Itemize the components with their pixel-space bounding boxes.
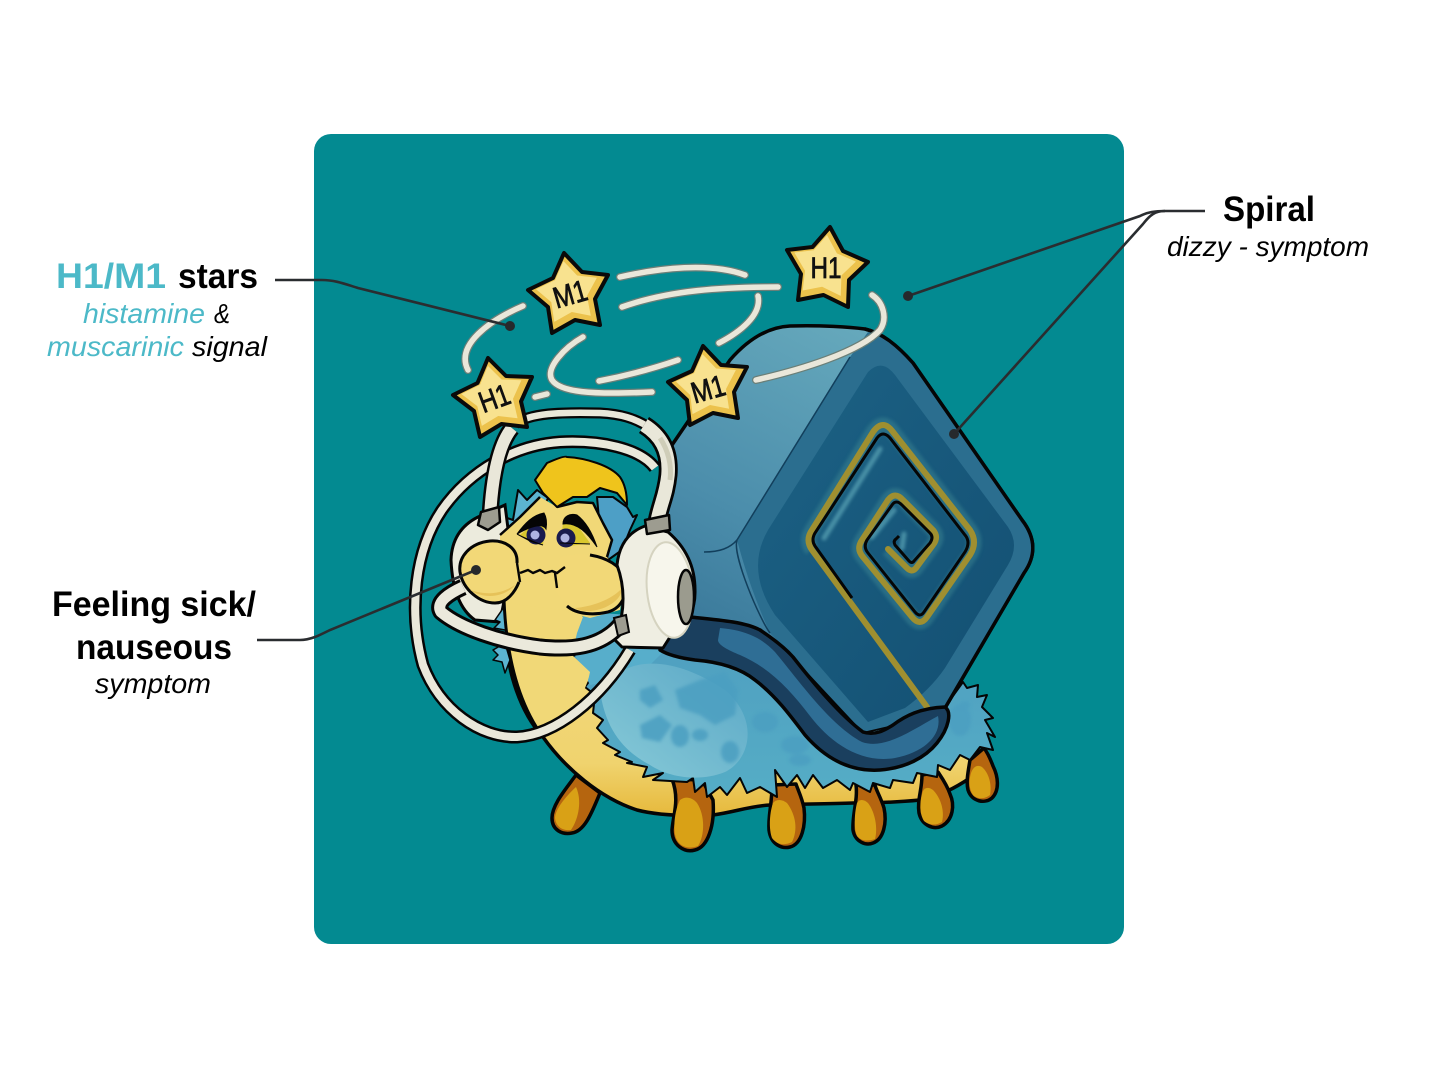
star: M1 top: M1 bbox=[549, 274, 591, 315]
shell: crease line bbox=[704, 357, 850, 633]
label: H1/M1 stars: histamine bbox=[83, 298, 205, 329]
shell: side face bbox=[640, 326, 1033, 732]
label: H1/M1 stars: stars bbox=[178, 257, 258, 296]
earcup: left bbox=[451, 505, 512, 622]
headband: top arch thin part bbox=[515, 413, 650, 428]
hair: golden quiff bbox=[535, 457, 627, 507]
head: outline bbox=[500, 497, 612, 557]
label: H1/M1 stars bbox=[47, 257, 268, 362]
label: H1/M1 stars: muscarinic bbox=[47, 331, 184, 362]
star: H1 right bbox=[787, 227, 868, 307]
label: H1/M1 stars: signal bbox=[192, 331, 268, 362]
eye: left bbox=[517, 513, 547, 545]
headband: right post bbox=[644, 425, 671, 522]
microphone boom bbox=[440, 587, 629, 648]
swirl: dizziness orbit lines bbox=[465, 267, 884, 397]
fur: left head tuft bbox=[500, 490, 548, 560]
panel: teal illustration background bbox=[314, 134, 1124, 944]
label: feeling sick/nauseous symptom: symptom bbox=[95, 668, 211, 699]
collar: right band clip bbox=[645, 515, 670, 534]
fur: patch behind neck bbox=[570, 612, 665, 685]
spiral: black line bbox=[813, 434, 968, 615]
star: M1 top bbox=[528, 253, 608, 333]
earcup: inner grey opening bbox=[678, 570, 694, 624]
shell: outline right side bbox=[865, 329, 1033, 708]
label: H1/M1 stars: H1/M1 bbox=[56, 257, 166, 296]
leader: feeling sick bbox=[257, 565, 481, 640]
fur: darker spots bbox=[640, 672, 971, 766]
star: H1 left bbox=[453, 358, 532, 437]
shell: spiral snail shell bbox=[640, 326, 1033, 732]
spiral: inner highlights bbox=[824, 449, 904, 548]
fur: neck tufts bbox=[493, 607, 510, 673]
fur: light front lobe bbox=[600, 664, 748, 778]
label: feeling sick/nauseous symptom: Feeling sick/ bbox=[52, 585, 256, 624]
neck bbox=[504, 590, 590, 737]
shell: front face bbox=[737, 332, 1033, 732]
cheek: right bbox=[555, 554, 626, 614]
collar: left band clip bbox=[478, 507, 500, 530]
star: H1 left: H1 bbox=[475, 378, 515, 420]
leg: back leg bbox=[552, 775, 600, 833]
legs: row of orange feet bbox=[672, 748, 997, 851]
leader: spiral with two branches bbox=[903, 211, 1205, 439]
cheek: left bbox=[460, 541, 519, 603]
star: M1 bottom: M1 bbox=[687, 369, 729, 410]
label: spiral dizzy symptom bbox=[1167, 190, 1369, 262]
spiral: soft glow bbox=[808, 425, 974, 622]
spiral: gold line bbox=[808, 425, 974, 707]
illustration: dizzy snail creature bbox=[415, 227, 1033, 851]
label: H1/M1 stars: & bbox=[214, 298, 230, 329]
head: face shape bbox=[500, 497, 625, 618]
earcup: rim bbox=[642, 540, 698, 640]
label: spiral dizzy symptom: Spiral bbox=[1223, 190, 1315, 229]
mouth: queasy wavy line bbox=[517, 563, 565, 588]
label: spiral dizzy symptom: dizzy - symptom bbox=[1167, 231, 1369, 262]
body: yellow caterpillar body bbox=[507, 630, 980, 815]
label: feeling sick/nauseous symptom bbox=[52, 585, 256, 699]
tail: dark blue band under shell bbox=[660, 617, 949, 770]
label: feeling sick/nauseous symptom: nauseous bbox=[76, 628, 232, 667]
star: H1 right: H1 bbox=[810, 252, 842, 285]
headband: left post bbox=[490, 428, 512, 517]
neck and head: yellow with puffed cheeks bbox=[451, 457, 637, 737]
headset: bands, ear cup and microphone bbox=[415, 413, 698, 737]
eye: right bbox=[556, 514, 597, 548]
leader: H1/M1 stars bbox=[275, 280, 515, 331]
earcup: right bbox=[615, 526, 695, 648]
cheek shading bbox=[470, 585, 622, 611]
fur: right head tuft bbox=[597, 497, 637, 560]
star: M1 bottom bbox=[668, 346, 747, 425]
fur: blue fuzzy back bbox=[570, 612, 995, 797]
headband: large loop bbox=[415, 442, 655, 737]
